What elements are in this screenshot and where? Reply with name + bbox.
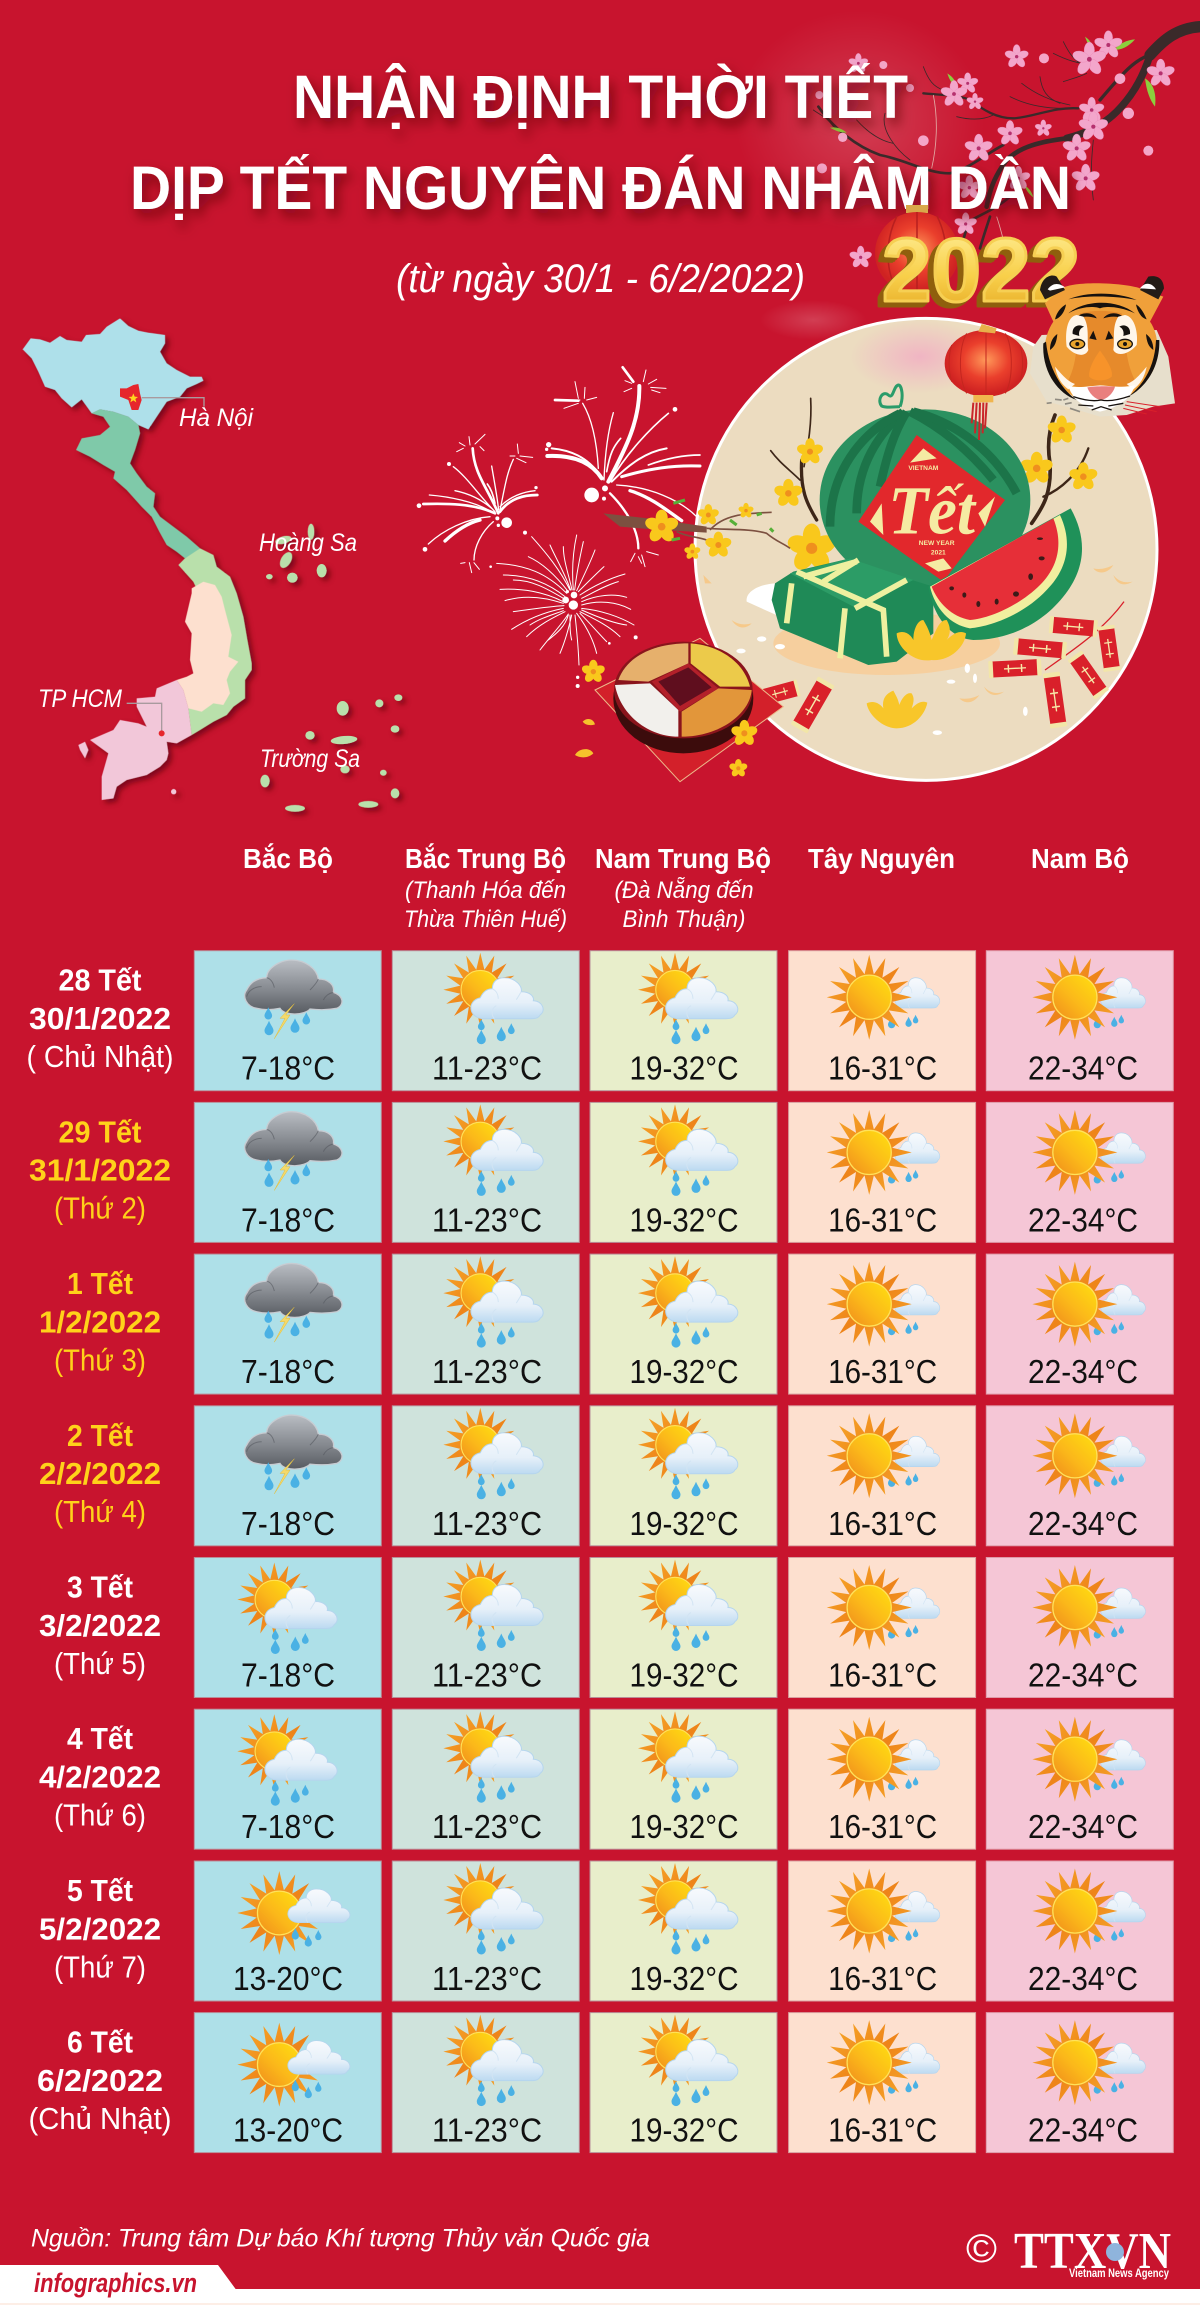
column headers	[243, 843, 1129, 933]
soft glow behind title	[735, 10, 985, 230]
cell: row 8 Nam Trung Bo	[590, 2013, 777, 2153]
cell: row 7 Tay Nguyen	[789, 1861, 976, 2001]
cell: row 6 Nam Bo: 22-34°C	[1028, 1808, 1138, 1845]
column headers: (Đà Nẵng đến	[614, 876, 754, 904]
region: Bac Trung Bo	[76, 409, 200, 558]
row label: 3 Tet	[39, 1570, 161, 1681]
firework: left	[423, 434, 537, 573]
map labels	[38, 404, 360, 773]
row label: 29 Tet	[29, 1114, 171, 1226]
cell: row 8 Nam Bo: 22-34°C	[1028, 2112, 1138, 2149]
cell: row 3 Nam Trung Bo	[590, 1254, 777, 1394]
cell: row 5 Tay Nguyen	[789, 1558, 976, 1698]
logo: TTXVN	[966, 2223, 1171, 2280]
Tet diamond: 2021	[931, 549, 946, 556]
region: Nam Trung Bo	[178, 548, 252, 735]
cell: row 2 Bac Trung Bo: 11-23°C	[432, 1201, 542, 1238]
cell: row 4 Bac Bo	[194, 1406, 381, 1546]
number 2022: 2022	[882, 221, 1080, 321]
column headers: Nam Bộ	[1031, 843, 1129, 874]
cell: row 2 Tay Nguyen: 16-31°C	[828, 1201, 937, 1238]
row label: 28 Tet: 28 Tết	[58, 963, 142, 998]
cell: row 8 Nam Trung Bo: 19-32°C	[630, 2112, 738, 2149]
cell: row 4 Tay Nguyen: 16-31°C	[828, 1505, 937, 1542]
source note: Nguồn: Trung tâm Dự báo Khí tượng Thủy văn Quốc gia	[31, 2225, 650, 2253]
cell: row 4 Nam Trung Bo	[590, 1406, 777, 1546]
cell: row 5 Nam Bo	[986, 1558, 1173, 1698]
row label: 2 Tet: (Thứ 4)	[54, 1494, 146, 1529]
map labels: Trường Sa	[260, 745, 360, 773]
firework: round	[497, 535, 634, 665]
cell: row 6 Nam Bo	[986, 1709, 1173, 1849]
row label: 29 Tet: 29 Tết	[58, 1114, 142, 1149]
row label: 4 Tet: 4/2/2022	[39, 1760, 161, 1794]
row label: 1 Tet: 1 Tết	[67, 1266, 133, 1301]
cell: row 3 Tay Nguyen	[789, 1254, 976, 1394]
cell: row 8 Nam Bo	[986, 2013, 1173, 2153]
row label: 6 Tet: 6 Tết	[67, 2025, 133, 2060]
cell: row 5 Bac Trung Bo: 11-23°C	[432, 1656, 542, 1694]
cell: row 8 Bac Trung Bo: 11-23°C	[432, 2112, 542, 2149]
logo: TTXVN: Vietnam News Agency	[1069, 2266, 1169, 2280]
cell: row 7 Bac Trung Bo: 11-23°C	[432, 1960, 542, 1997]
marker: Ha Noi	[120, 384, 204, 410]
cell: row 5 Nam Bo: 22-34°C	[1028, 1656, 1138, 1694]
subtitle: (từ ngày 30/1 - 6/2/2022)	[396, 257, 805, 301]
cell: row 5 Bac Bo: 7-18°C	[241, 1656, 335, 1694]
cell: row 6 Bac Trung Bo	[392, 1709, 579, 1849]
row label: 5 Tet: 5/2/2022	[39, 1911, 161, 1946]
row label: 28 Tet: ( Chủ Nhật)	[26, 1039, 174, 1074]
row label: 4 Tet: 4 Tết	[67, 1721, 133, 1756]
row label: 3 Tet: 3 Tết	[67, 1570, 133, 1604]
cell: row 8 Bac Trung Bo	[392, 2013, 579, 2153]
cell: row 4 Bac Trung Bo: 11-23°C	[432, 1505, 542, 1542]
cell: row 1 Nam Trung Bo	[590, 951, 777, 1091]
Tet diamond	[858, 435, 1005, 582]
cell: row 7 Nam Trung Bo: 19-32°C	[630, 1960, 738, 1997]
cell: row 4 Nam Bo: 22-34°C	[1028, 1505, 1138, 1542]
cell: row 5 Bac Trung Bo	[392, 1558, 579, 1698]
cell: row 6 Tay Nguyen	[789, 1709, 976, 1849]
title	[130, 63, 1071, 222]
cell: row 7 Tay Nguyen: 16-31°C	[828, 1960, 937, 1997]
column headers: (Thanh Hóa đến	[405, 877, 566, 904]
row label: 28 Tet: 30/1/2022	[29, 1001, 171, 1036]
cell: row 5 Bac Bo	[194, 1558, 381, 1698]
fireworks	[417, 367, 700, 665]
cell: row 2 Nam Trung Bo	[590, 1102, 777, 1242]
map labels: Hà Nội	[179, 404, 254, 432]
cell: row 3 Nam Trung Bo: 19-32°C	[630, 1353, 738, 1390]
cell: row 1 Nam Bo: 22-34°C	[1028, 1050, 1138, 1087]
cell: row 3 Bac Trung Bo	[392, 1254, 579, 1394]
cell: row 4 Nam Bo	[986, 1406, 1173, 1546]
row label: 3 Tet: (Thứ 5)	[54, 1646, 146, 1681]
apricot branch	[603, 500, 790, 560]
cell: row 7 Nam Trung Bo	[590, 1861, 777, 2001]
marker: TP HCM	[127, 703, 165, 736]
banh chung	[747, 558, 933, 665]
cell: row 6 Tay Nguyen: 16-31°C	[828, 1808, 937, 1845]
cell: row 6 Bac Bo	[194, 1709, 381, 1849]
cell: row 3 Nam Bo	[986, 1254, 1173, 1394]
map labels: TP HCM	[38, 685, 122, 713]
cell: row 5 Nam Trung Bo	[590, 1558, 777, 1698]
row label: 1 Tet: 1/2/2022	[39, 1304, 161, 1339]
row label: 4 Tet	[39, 1721, 161, 1832]
row label: 5 Tet: 5 Tết	[67, 1873, 133, 1908]
gold flowers	[867, 620, 966, 728]
cell: row 3 Bac Trung Bo: 11-23°C	[432, 1353, 542, 1390]
cell: row 1 Nam Bo	[986, 951, 1173, 1091]
cell: row 5 Tay Nguyen: 16-31°C	[828, 1656, 937, 1694]
cell: row 3 Tay Nguyen: 16-31°C	[828, 1353, 937, 1390]
cell: row 1 Tay Nguyen	[789, 951, 976, 1091]
Tet diamond: VIETNAM	[908, 465, 939, 472]
cell: row 1 Nam Trung Bo: 19-32°C	[630, 1050, 738, 1087]
title: DỊP TẾT NGUYÊN ĐÁN NHÂM DẦN	[130, 154, 1071, 222]
cell: row 7 Nam Bo	[986, 1861, 1173, 2001]
five-fruit tray	[575, 635, 783, 782]
cell: row 8 Tay Nguyen	[789, 2013, 976, 2153]
cell: row 6 Bac Bo: 7-18°C	[241, 1808, 335, 1845]
row label: 29 Tet: (Thứ 2)	[54, 1191, 146, 1226]
row label: 6 Tet: 6/2/2022	[37, 2063, 163, 2098]
cell: row 1 Bac Trung Bo: 11-23°C	[432, 1050, 542, 1087]
row label: 3 Tet: 3/2/2022	[39, 1608, 161, 1643]
cell: row 1 Tay Nguyen: 16-31°C	[828, 1050, 937, 1087]
row labels	[26, 963, 174, 2136]
cell: row 1 Bac Bo	[194, 951, 381, 1091]
title: NHẬN ĐỊNH THỜI TIẾT	[293, 63, 908, 131]
cell: row 7 Bac Bo: 13-20°C	[233, 1960, 343, 1997]
twig flowers	[773, 416, 1099, 574]
row label: 2 Tet: 2/2/2022	[39, 1456, 161, 1491]
cell: row 3 Bac Bo	[194, 1254, 381, 1394]
blossom branch	[813, 27, 1200, 269]
cell: row 2 Nam Trung Bo: 19-32°C	[630, 1201, 738, 1238]
firework stars and dots	[417, 407, 677, 610]
cell: row 4 Bac Bo: 7-18°C	[241, 1505, 335, 1542]
column headers: Nam Trung Bộ	[595, 843, 771, 874]
cell: row 7 Bac Bo	[194, 1861, 381, 2001]
apricot twigs	[771, 398, 1088, 523]
cell: row 2 Bac Trung Bo	[392, 1102, 579, 1242]
Tet diamond: NEW YEAR	[919, 540, 955, 547]
firecrackers	[759, 602, 1124, 734]
row label: 5 Tet	[39, 1873, 161, 1984]
column headers: Tây Nguyên	[808, 843, 955, 874]
row label: 6 Tet	[28, 2025, 172, 2136]
watermelon slice	[928, 508, 1082, 640]
cell: row 3 Bac Bo: 7-18°C	[241, 1353, 335, 1390]
row label: 1 Tet: (Thứ 3)	[54, 1342, 146, 1377]
cell: row 6 Nam Trung Bo	[590, 1709, 777, 1849]
islands	[260, 524, 402, 812]
column headers: Bắc Trung Bộ	[405, 843, 566, 874]
Tet diamond: Tết	[888, 472, 977, 548]
cell: row 6 Nam Trung Bo: 19-32°C	[630, 1808, 738, 1845]
cell: row 4 Tay Nguyen	[789, 1406, 976, 1546]
region: Tay Nguyen	[177, 582, 238, 712]
column headers: Bắc Bộ	[243, 843, 333, 874]
row label: 2 Tet: 2 Tết	[67, 1418, 133, 1453]
cell: row 4 Nam Trung Bo: 19-32°C	[630, 1505, 738, 1542]
row label: 4 Tet: (Thứ 6)	[54, 1798, 146, 1832]
cell: row 5 Nam Trung Bo: 19-32°C	[630, 1656, 738, 1694]
map labels: Hoàng Sa	[259, 529, 357, 557]
cell: row 2 Tay Nguyen	[789, 1102, 976, 1242]
row label: 2 Tet	[39, 1418, 161, 1529]
gold petals and rice	[703, 565, 1133, 735]
firework: upper	[547, 367, 700, 567]
row label: 6 Tet: (Chủ Nhật)	[28, 2101, 172, 2136]
cell: row 2 Nam Bo	[986, 1102, 1173, 1242]
column headers: Bình Thuận)	[622, 906, 746, 933]
lantern lower	[945, 324, 1027, 440]
cell: row 2 Bac Bo: 7-18°C	[241, 1201, 335, 1238]
cell: row 6 Bac Trung Bo: 11-23°C	[432, 1808, 542, 1845]
cell: row 3 Nam Bo: 22-34°C	[1028, 1353, 1138, 1390]
cell: row 4 Bac Trung Bo	[392, 1406, 579, 1546]
lantern upper	[875, 205, 959, 294]
logo: TTXVN: ©	[966, 2227, 997, 2271]
cell: row 2 Bac Bo	[194, 1102, 381, 1242]
illustration: Tet festive circle	[695, 300, 1157, 780]
row label: 5 Tet: (Thứ 7)	[54, 1949, 146, 1984]
cell: row 7 Bac Trung Bo	[392, 1861, 579, 2001]
region: Nam Bo	[90, 680, 192, 800]
cell: row 8 Bac Bo: 13-20°C	[233, 2112, 343, 2149]
tiger head	[1030, 275, 1175, 417]
column headers: Thừa Thiên Huế)	[404, 906, 567, 933]
forecast table	[194, 951, 1173, 2153]
cell: row 8 Bac Bo	[194, 2013, 381, 2153]
cell: row 8 Tay Nguyen: 16-31°C	[828, 2112, 937, 2149]
footer band with infographics.vn: infographics.vn	[34, 2268, 197, 2298]
cell: row 1 Bac Bo: 7-18°C	[241, 1050, 335, 1087]
cell: row 2 Nam Bo: 22-34°C	[1028, 1201, 1138, 1238]
logo: TTXVN: TTXVN	[1014, 2223, 1171, 2280]
cell: row 1 Bac Trung Bo	[392, 951, 579, 1091]
map of Vietnam	[23, 318, 402, 812]
row label: 29 Tet: 31/1/2022	[29, 1153, 171, 1188]
row label: 28 Tet	[26, 963, 174, 1074]
row label: 1 Tet	[39, 1266, 161, 1377]
footer band with infographics.vn	[0, 2265, 1200, 2305]
region: Bac Bo	[23, 318, 203, 429]
cell: row 7 Nam Bo: 22-34°C	[1028, 1960, 1138, 1997]
watermelon	[820, 385, 1030, 591]
